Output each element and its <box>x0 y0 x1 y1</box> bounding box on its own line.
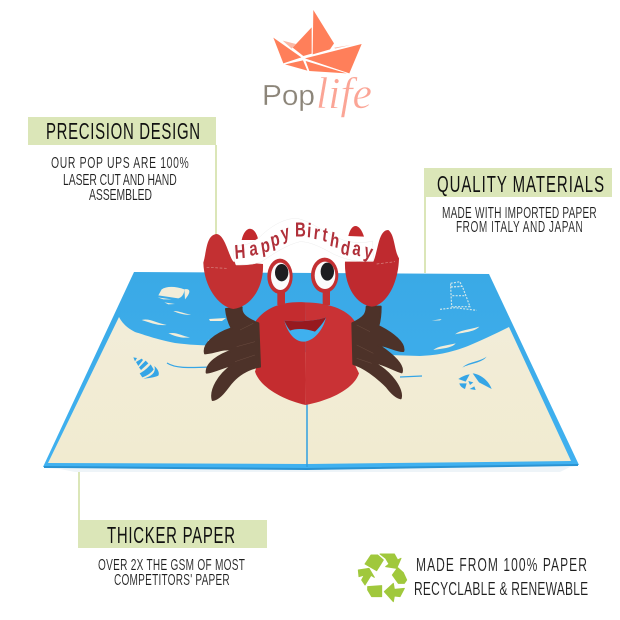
right claw <box>345 230 399 307</box>
claw score marks <box>207 262 395 268</box>
logo word: life: life <box>316 69 372 118</box>
panel: quality materials <box>424 168 612 236</box>
more water ripples <box>208 318 226 342</box>
heading: QUALITY MATERIALS <box>437 172 604 198</box>
description: OVER 2X THE GSM OF MOST <box>98 556 245 574</box>
connector lines <box>78 145 426 520</box>
icon: paper boat <box>273 10 362 73</box>
caption <box>414 556 588 600</box>
pop-up card <box>43 272 579 472</box>
description: LASER CUT AND HAND <box>63 171 177 189</box>
back claw tips <box>242 226 364 240</box>
description: MADE WITH IMPORTED PAPER <box>442 204 597 222</box>
legs <box>205 307 403 400</box>
card sand <box>48 317 571 464</box>
crab body right <box>305 302 359 405</box>
crab <box>203 218 403 405</box>
icon: starfish cutout <box>458 373 492 390</box>
heading bar <box>28 117 216 145</box>
description: COMPETITORS' PAPER <box>114 571 230 589</box>
panel: precision design <box>28 117 216 204</box>
left claw <box>203 234 263 309</box>
caption: RECYCLABLE & RENEWABLE <box>414 580 588 600</box>
right sea details <box>432 282 492 390</box>
logo: Poplife <box>262 10 372 118</box>
left eye <box>267 259 293 294</box>
fold line <box>306 404 308 467</box>
description: OUR POP UPS ARE 100% <box>51 154 189 172</box>
left sea details <box>142 287 191 338</box>
sand line details <box>167 363 422 377</box>
card bottom edge line <box>44 465 578 469</box>
icon: conch shell cutout <box>133 357 159 379</box>
heading bar <box>424 168 612 197</box>
heading: THICKER PAPER <box>107 523 235 549</box>
heading bar <box>78 520 267 548</box>
description <box>442 204 597 236</box>
description: FROM ITALY AND JAPAN <box>456 218 583 236</box>
description <box>51 154 189 204</box>
logo word: Pop: Pop <box>262 80 315 112</box>
description <box>98 556 245 589</box>
icon: sailboat cutout <box>158 287 189 304</box>
right eye <box>311 258 338 293</box>
mouth <box>284 317 326 342</box>
card blue base <box>43 272 579 469</box>
crab body left <box>255 302 306 405</box>
icon: recycle arrows <box>358 554 407 602</box>
leg detail <box>235 323 373 363</box>
water ripples <box>432 319 479 350</box>
banner <box>234 218 375 265</box>
icon: lighthouse cutout <box>440 282 477 310</box>
caption: MADE FROM 100% PAPER <box>416 556 587 576</box>
heading: PRECISION DESIGN <box>46 119 200 145</box>
panel: thicker paper <box>78 520 267 589</box>
card soft shadow <box>60 467 570 472</box>
sand wave line <box>462 357 487 368</box>
eye stalks <box>277 289 330 305</box>
water ripples <box>173 311 191 315</box>
panel: recyclable <box>358 554 588 602</box>
description: ASSEMBLED <box>89 186 152 204</box>
banner text: HappyBirthday <box>234 219 375 264</box>
